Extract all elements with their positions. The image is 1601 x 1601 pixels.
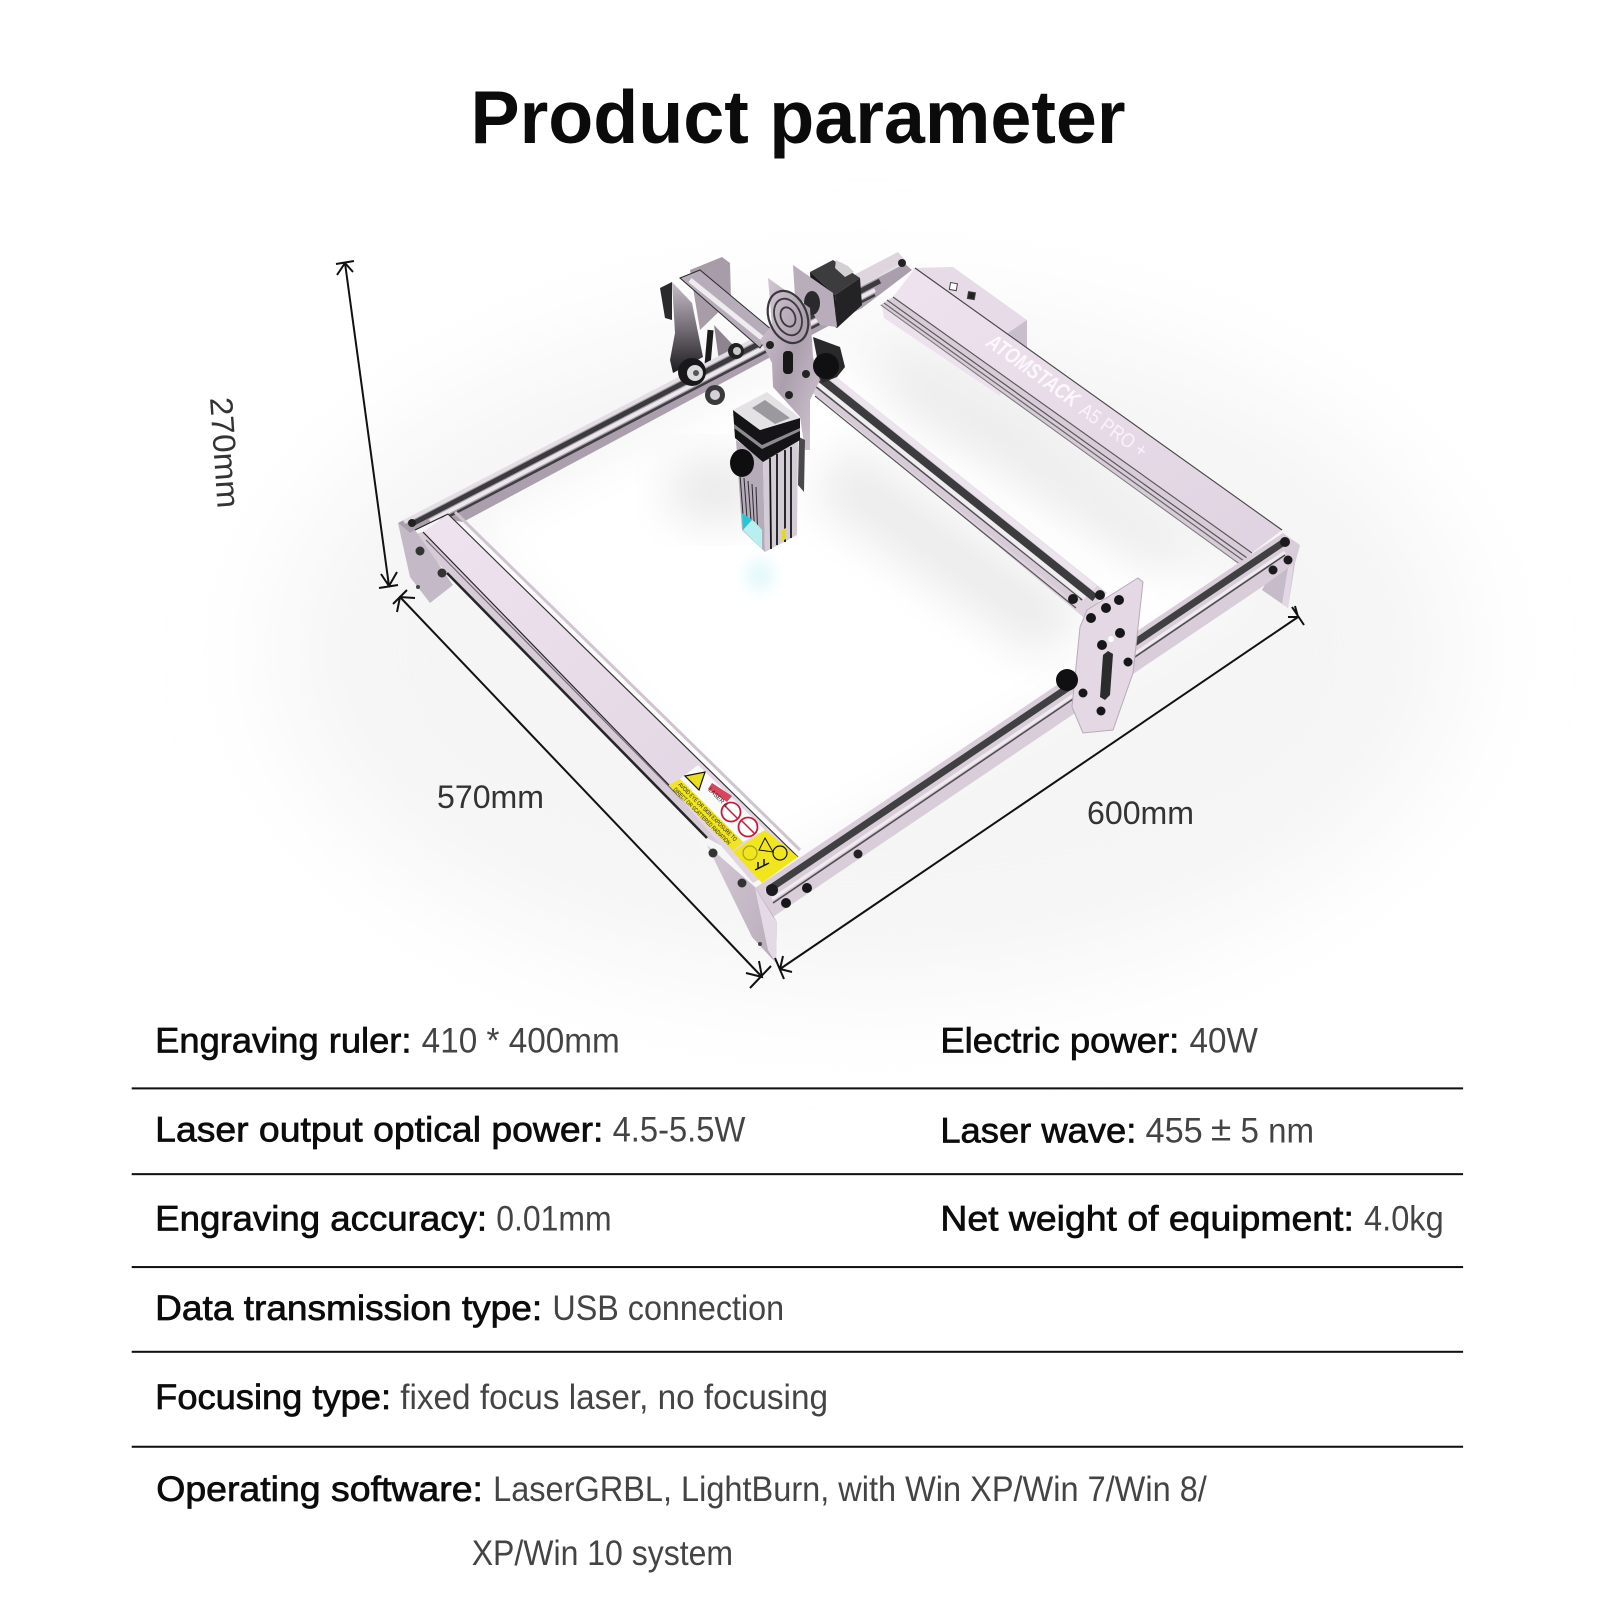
carriage knob xyxy=(813,337,845,383)
dimension label: 600mm: 600mm xyxy=(1087,795,1194,831)
title: Product parameter xyxy=(470,75,1126,159)
engraving ruler: 410 * 400mm xyxy=(422,1022,620,1061)
dimension arrow: depth xyxy=(393,590,771,988)
laser engraver machine xyxy=(398,252,1300,963)
laser warning label: DIRECT OR SCATTERED RADIATION xyxy=(672,787,731,847)
engraving ruler: Engraving ruler: xyxy=(155,1022,411,1061)
front leg xyxy=(707,845,777,963)
data transmission type: Data transmission type: xyxy=(155,1289,542,1328)
laser output optical power: Laser output optical power: xyxy=(155,1110,603,1149)
front rail xyxy=(755,533,1300,917)
net weight: Net weight of equipment: xyxy=(940,1199,1354,1238)
data transmission type xyxy=(155,1289,784,1328)
brand mark: ATOMSTACK xyxy=(981,328,1086,413)
operating software: Operating software: xyxy=(156,1470,483,1509)
engraving accuracy: 0.01mm xyxy=(496,1199,612,1238)
laser module xyxy=(730,392,805,552)
engraving accuracy: Engraving accuracy: xyxy=(155,1199,487,1238)
dimension label: 570mm: 570mm xyxy=(437,779,544,815)
dimension arrow: width xyxy=(775,606,1304,979)
laser wave: 455 xyxy=(1146,1111,1203,1150)
controller box behind right beam xyxy=(882,267,1027,396)
fan plate xyxy=(760,278,820,450)
laser output optical power: 4.5-5.5W xyxy=(613,1110,746,1149)
engraving ruler xyxy=(155,1022,620,1061)
dimension label: 270mm: 270mm xyxy=(203,396,247,509)
laser wave: 5 nm xyxy=(1241,1111,1314,1150)
focusing type: Focusing type: xyxy=(155,1378,391,1417)
operating software: XP/Win 10 system xyxy=(472,1534,733,1573)
left beam side rails xyxy=(412,532,733,852)
X bar highlight xyxy=(690,280,762,338)
wheels on back rail xyxy=(678,343,744,405)
fan grill xyxy=(760,285,816,349)
data transmission type: USB connection xyxy=(552,1289,784,1328)
left corner and leg xyxy=(398,519,453,603)
laser wave: ± xyxy=(1211,1109,1231,1148)
right beam xyxy=(893,268,1282,553)
rear left carriage xyxy=(660,257,735,373)
X bar behind fan plate xyxy=(680,270,772,348)
net weight: 4.0kg xyxy=(1364,1199,1444,1238)
right leg xyxy=(1262,545,1300,608)
engraving accuracy xyxy=(155,1199,612,1238)
front carriage plate xyxy=(1056,578,1143,733)
right beam rails xyxy=(880,297,1252,565)
gantry rail xyxy=(813,360,1107,617)
model mark: A5 PRO + xyxy=(1075,399,1151,462)
focusing type xyxy=(155,1378,828,1417)
operating software: LaserGRBL, LightBurn, with Win XP/Win 7/Win 8/ xyxy=(493,1470,1207,1509)
dimension arrow: height xyxy=(336,261,398,588)
left beam xyxy=(415,512,800,883)
back rail (X axis) to left corner xyxy=(398,252,912,533)
focusing type: fixed focus laser, no focusing xyxy=(400,1378,828,1417)
laser warning label: LASER 4 xyxy=(707,787,729,809)
laser wave xyxy=(940,1109,1314,1150)
stepper motor xyxy=(793,260,862,328)
laser warning label: AVOID EYE OR SKIN EXPOSURE TO xyxy=(677,782,738,843)
operating software xyxy=(156,1470,1207,1573)
electric power: Electric power: xyxy=(940,1022,1179,1061)
laser wave: Laser wave: xyxy=(940,1111,1136,1150)
laser warning label xyxy=(669,765,798,883)
electric power: 40W xyxy=(1189,1022,1259,1061)
parameter table xyxy=(132,1022,1463,1573)
